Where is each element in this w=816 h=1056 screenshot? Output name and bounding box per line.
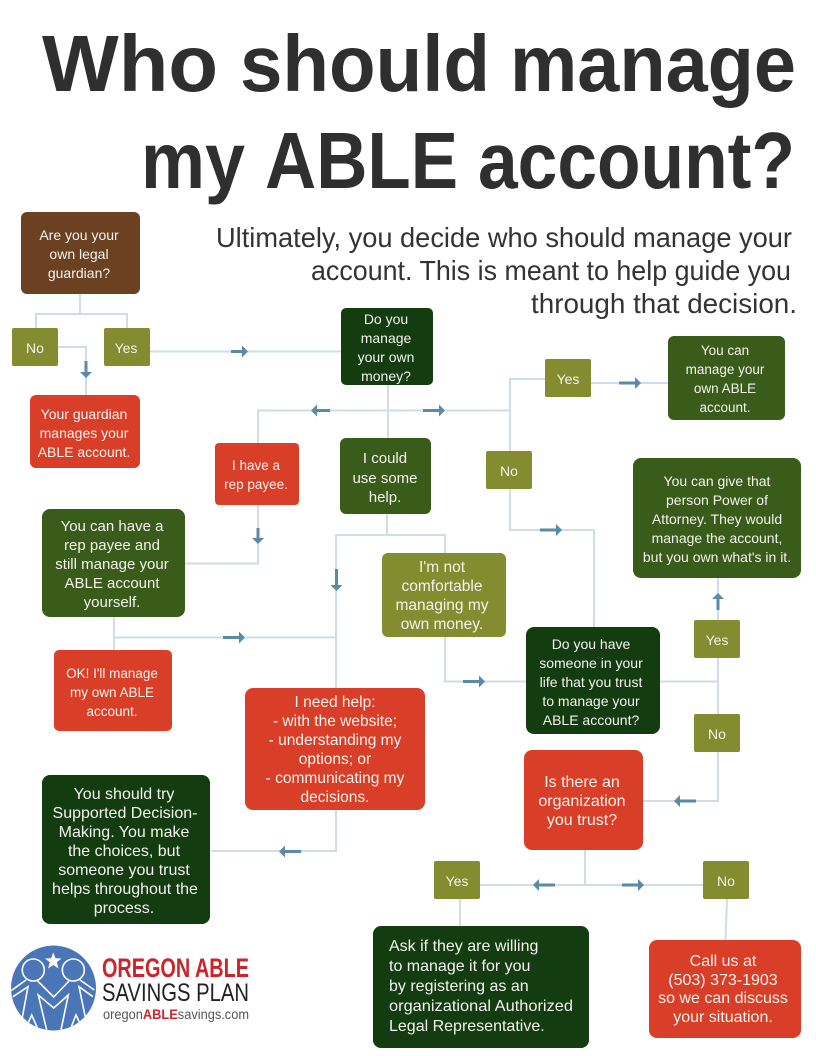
logo: Oregon ABLE Savings Plan xyxy=(11,946,249,1030)
box: authorized legal representative xyxy=(373,926,589,1048)
box: are you your own legal guardian xyxy=(21,212,140,294)
box: supported decision-making: the choices, but xyxy=(68,843,181,860)
box: I need help: options; or xyxy=(299,751,371,768)
label: Yes xyxy=(104,328,150,366)
box: supported decision-making: Making. You make xyxy=(59,824,189,841)
title: ABLE xyxy=(265,116,458,205)
box: someone you trust xyxy=(526,627,660,734)
box: I'm not comfortable: own money. xyxy=(401,616,483,633)
box: authorized legal representative: Ask if they are willing xyxy=(389,938,538,955)
box: you can manage your own ABLE account: You can xyxy=(701,343,749,358)
box: supported decision-making: someone you trust xyxy=(58,862,190,879)
box: power of attorney: You can give that xyxy=(664,473,771,489)
connector: Yes to authorized representative xyxy=(459,899,461,926)
box: someone you trust: someone in your xyxy=(539,655,643,671)
box: you can manage your own ABLE account: manage your xyxy=(686,362,765,377)
connector: guardian question to No and Yes xyxy=(36,294,127,328)
box: I could use some help: I could xyxy=(363,450,407,467)
box: your guardian manages: Your guardian xyxy=(41,406,127,422)
label: No, organization: No xyxy=(717,873,735,889)
label: No, organization xyxy=(703,861,749,899)
box: I have a rep payee: I have a xyxy=(232,458,281,473)
box: are you your own legal guardian: guardian? xyxy=(48,265,110,281)
subtitle: Ultimately, you decide who should manage your xyxy=(216,222,792,253)
box: OK I'll manage: OK! I'll manage xyxy=(66,666,158,681)
box: someone you trust: ABLE account? xyxy=(543,712,639,728)
box: supported decision-making: process. xyxy=(94,900,154,917)
box: authorized legal representative: to manage it for you xyxy=(389,958,530,975)
subtitle: through that decision. xyxy=(531,288,797,319)
box: do you manage your own money: your own xyxy=(358,349,414,365)
box: call us: your situation. xyxy=(673,1009,773,1026)
box: I need help: I need help: xyxy=(294,694,376,711)
box: you can have a rep payee: You can have a xyxy=(61,518,164,535)
box: you can have a rep payee: rep payee and xyxy=(64,537,160,554)
box: do you manage your own money: Do you xyxy=(364,311,408,327)
box: someone you trust: Do you have xyxy=(552,636,631,652)
arrow: Yes to can manage xyxy=(591,377,668,389)
box: you can manage your own ABLE account xyxy=(668,336,785,420)
arrow: No to guardian manages xyxy=(58,347,92,395)
box: I could use some help xyxy=(340,438,431,514)
title xyxy=(42,19,796,205)
title: manage xyxy=(510,19,796,108)
box: someone you trust: to manage your xyxy=(542,693,640,709)
label: Yes, organization xyxy=(434,861,480,899)
box: call us: (503) 373-1903 xyxy=(668,972,778,989)
logo text: SAVINGS PLAN xyxy=(102,979,249,1007)
box: I have a rep payee xyxy=(215,443,299,505)
title: my xyxy=(141,116,245,205)
box: I need help xyxy=(245,688,425,810)
box: is there an organization xyxy=(524,750,643,850)
box: do you manage your own money: manage xyxy=(361,330,412,346)
connector: No to call us xyxy=(726,899,727,940)
box: your guardian manages xyxy=(30,395,140,468)
label: No: No xyxy=(26,340,44,356)
box: supported decision-making: helps throughout the xyxy=(52,881,198,898)
box: call us: so we can discuss xyxy=(658,990,788,1007)
connector: right branch to Yes and No xyxy=(510,379,545,451)
logo text: oregonABLEsavings.com xyxy=(103,1006,249,1022)
label: Yes: Yes xyxy=(115,340,137,356)
box: I'm not comfortable: managing my xyxy=(395,597,489,614)
box: authorized legal representative: Legal Representative. xyxy=(389,1018,545,1035)
connector: could use help to options xyxy=(336,514,445,688)
box: OK I'll manage: my own ABLE xyxy=(70,685,154,700)
arrow: to rep payee xyxy=(311,404,330,416)
box: do you manage your own money xyxy=(341,308,433,385)
box: power of attorney: Attorney. They would xyxy=(652,511,782,527)
box: I have a rep payee: rep payee. xyxy=(224,477,288,492)
connector: organization question to Yes and No xyxy=(480,850,703,885)
box: power of attorney xyxy=(633,458,801,578)
label: Yes, trusted person: Yes xyxy=(706,632,728,648)
box: supported decision-making xyxy=(42,775,210,924)
box: is there an organization: organization xyxy=(538,793,626,810)
label: Yes, organization: Yes xyxy=(446,873,468,889)
arrow: not comfortable to trusted person xyxy=(445,637,527,688)
subtitle xyxy=(216,222,797,319)
box: is there an organization: you trust? xyxy=(547,812,617,829)
title: Who xyxy=(42,19,218,108)
box: I'm not comfortable: I'm not xyxy=(419,559,466,576)
box: I could use some help: help. xyxy=(369,489,401,506)
logo text: OREGON ABLE xyxy=(102,953,249,983)
arrow: No to organization question xyxy=(643,752,718,807)
box: power of attorney: manage the account, xyxy=(652,530,782,546)
box: OK I'll manage xyxy=(54,650,172,731)
arrow: No to trusted person xyxy=(510,489,594,627)
box: is there an organization: Is there an xyxy=(544,774,620,791)
label: No, trusted person xyxy=(694,714,740,752)
box: power of attorney: person Power of xyxy=(666,492,768,508)
box: you can have a rep payee xyxy=(42,509,185,617)
box: call us xyxy=(649,940,801,1038)
arrow: rep payee box to I need help xyxy=(114,617,336,650)
box: are you your own legal guardian: Are you your xyxy=(39,227,119,243)
arrow: to organization Yes xyxy=(533,879,555,891)
box: authorized legal representative: by registering as an xyxy=(389,978,529,995)
box: OK I'll manage: account. xyxy=(86,704,138,719)
box: you can have a rep payee: ABLE account xyxy=(64,575,160,592)
icon: circle with two figures and star xyxy=(11,946,96,1030)
box: you can have a rep payee: yourself. xyxy=(84,594,140,611)
box: you can manage your own ABLE account: own ABLE xyxy=(694,381,756,396)
box: supported decision-making: You should try xyxy=(74,786,174,803)
arrow: rep payee to keep managing xyxy=(185,505,264,564)
label: Yes, trusted person xyxy=(694,620,740,658)
box: you can manage your own ABLE account: account. xyxy=(699,400,751,415)
box: your guardian manages: manages your xyxy=(40,425,129,441)
label: Yes, manage own money xyxy=(545,359,591,397)
box: are you your own legal guardian: own legal xyxy=(49,246,109,262)
connector: trusted person to Yes and No xyxy=(660,658,718,714)
label: No xyxy=(12,328,58,366)
arrow: I need help to supported decision-making xyxy=(211,810,336,858)
subtitle: account. This is meant to help guide you xyxy=(311,255,791,286)
box: supported decision-making: Supported Decision- xyxy=(53,805,197,822)
box: authorized legal representative: organizational Authorized xyxy=(389,998,573,1015)
box: I could use some help: use some xyxy=(352,470,418,487)
arrow: to organization No xyxy=(622,879,644,891)
label: No, trusted person: No xyxy=(708,726,726,742)
box: call us: Call us at xyxy=(690,953,757,970)
logo text xyxy=(102,953,249,1022)
box: power of attorney: but you own what's in it. xyxy=(643,549,791,565)
label: Yes, manage own money: Yes xyxy=(557,371,579,387)
box: I need help: - understanding my xyxy=(269,732,402,749)
box: I need help: - with the website; xyxy=(273,713,397,730)
arrow: Yes to manage money question xyxy=(150,346,341,358)
box: do you manage your own money: money? xyxy=(361,368,411,384)
connector: money question to branches xyxy=(258,385,510,443)
box: someone you trust: life that you trust xyxy=(540,674,642,690)
box: you can have a rep payee: still manage your xyxy=(55,556,169,573)
box: I'm not comfortable xyxy=(382,553,506,637)
arrow: down to I need help xyxy=(330,569,342,591)
title: should xyxy=(240,19,490,108)
box: I need help: - communicating my xyxy=(266,770,405,787)
arrow: to right branch xyxy=(423,404,445,416)
box: I'm not comfortable: comfortable xyxy=(402,578,482,595)
box: your guardian manages: ABLE account. xyxy=(38,444,130,460)
label: No, manage own money: No xyxy=(500,463,518,479)
arrow: Yes to power of attorney xyxy=(712,578,724,620)
label: No, manage own money xyxy=(486,451,532,489)
box: I need help: decisions. xyxy=(301,789,369,806)
